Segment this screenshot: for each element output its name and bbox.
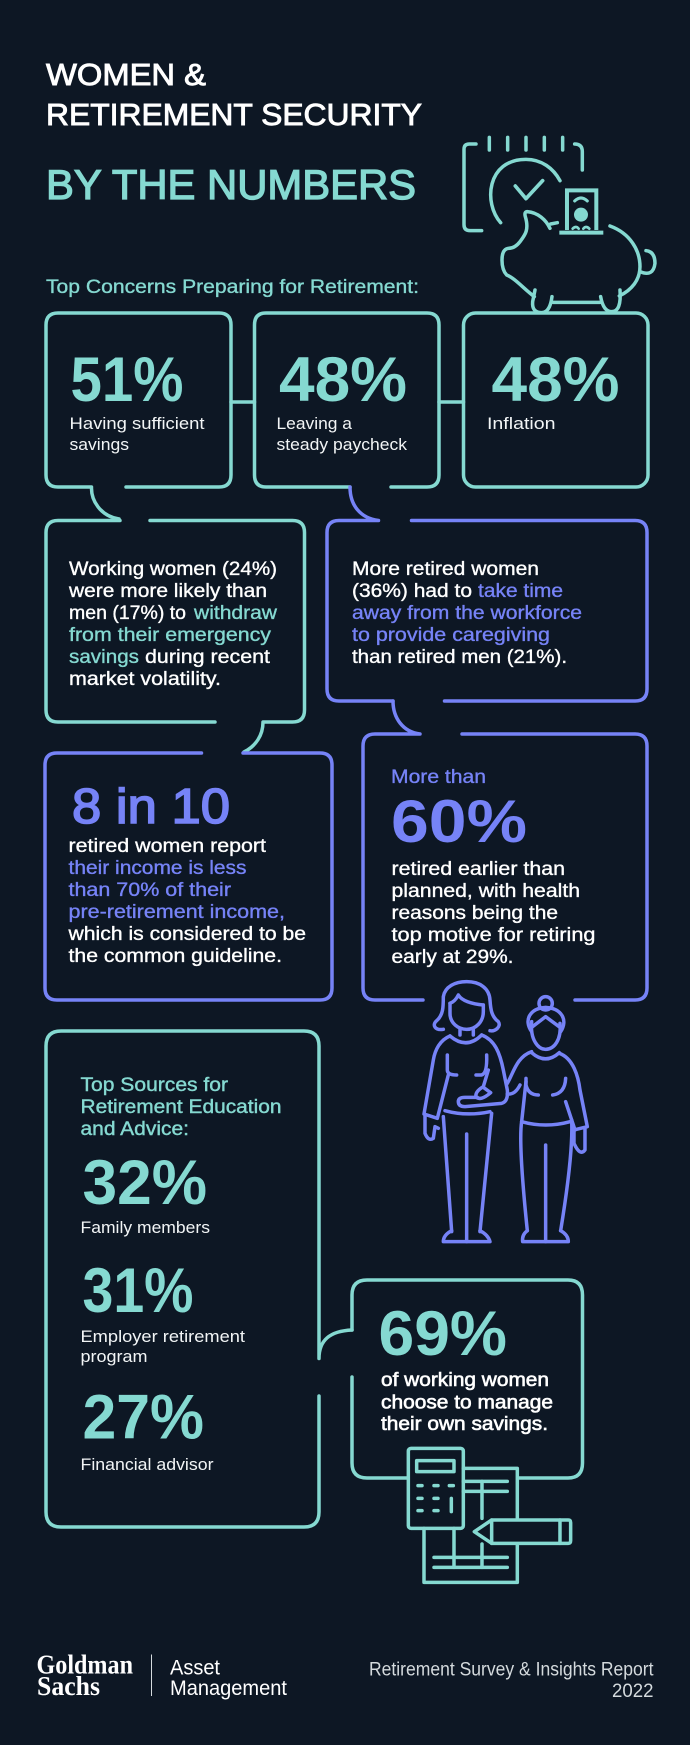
footer: asset management: Asset bbox=[170, 1656, 220, 1680]
footer: goldman sachs logo bbox=[36, 1650, 133, 1701]
footer: report name and year: Retirement Survey & Insights Report bbox=[369, 1660, 654, 1680]
panel: 8 in 10 retired women: retired women report bbox=[68, 836, 267, 857]
panel: caregiving time away: take time bbox=[478, 581, 563, 602]
heading: top sources: Retirement Education bbox=[80, 1097, 282, 1118]
footer: asset management bbox=[170, 1656, 287, 1700]
panel: emergency savings withdrawal: withdraw bbox=[193, 603, 277, 624]
panel: 69% manage own savings: their own savings. bbox=[381, 1414, 548, 1435]
stat: 31% employer retirement program: Employer retirement bbox=[80, 1327, 245, 1346]
panel: caregiving time away: (36%) had to bbox=[352, 581, 472, 602]
panel: 69% manage own savings: 69% bbox=[378, 1299, 507, 1369]
stat: 32% family members: Family members bbox=[80, 1218, 210, 1237]
panel: 69% manage own savings: of working women bbox=[381, 1370, 549, 1391]
panel: emergency savings withdrawal bbox=[46, 520, 304, 752]
panel: 48% inflation bbox=[464, 313, 648, 487]
panel: 8 in 10 retired women: pre-retirement income, bbox=[68, 902, 285, 923]
icon: clock and piggy bank bbox=[464, 137, 655, 313]
panel: more than 60% retired earlier: top motive for retiring bbox=[392, 925, 596, 946]
panel: 51% having sufficient savings bbox=[46, 313, 231, 519]
panel: caregiving time away: More retired women bbox=[352, 559, 539, 580]
footer: asset management: Management bbox=[170, 1677, 287, 1700]
title bbox=[46, 57, 422, 132]
panel: 8 in 10 retired women: 8 in 10 bbox=[72, 780, 230, 834]
footer: report name and year: 2022 bbox=[612, 1681, 654, 1702]
panel: caregiving time away: to provide caregiving bbox=[352, 625, 550, 646]
stat: 31% employer retirement program bbox=[80, 1256, 245, 1366]
panel: 8 in 10 retired women: their income is less bbox=[68, 858, 246, 879]
panel: emergency savings withdrawal: from their emergency bbox=[69, 625, 272, 646]
panel: 51% having sufficient savings: 51% bbox=[70, 345, 184, 415]
panel: 48% inflation: 48% bbox=[492, 345, 620, 415]
panel: more than 60% retired earlier: 60% bbox=[391, 788, 527, 855]
heading: top sources bbox=[80, 1075, 282, 1140]
panel: 48% inflation: Inflation bbox=[487, 414, 556, 433]
panel: more than 60% retired earlier: early at 29%. bbox=[392, 947, 514, 968]
panel: caregiving time away: than retired men (21%). bbox=[352, 647, 567, 668]
title: RETIREMENT SECURITY bbox=[46, 97, 422, 132]
subtitle: by the numbers: BY THE NUMBERS bbox=[46, 161, 416, 208]
footer: goldman sachs logo: Sachs bbox=[37, 1671, 100, 1701]
section heading: top concerns: Top Concerns Preparing for Retirement: bbox=[46, 276, 419, 298]
panel: more than 60% retired earlier: reasons being the bbox=[392, 903, 558, 924]
icon: two women arm in arm bbox=[424, 982, 587, 1242]
panel: emergency savings withdrawal: were more likely than bbox=[68, 581, 267, 602]
panel: 8 in 10 retired women: which is considered to be bbox=[67, 924, 306, 945]
panel: 48% leaving a steady paycheck: 48% bbox=[279, 345, 407, 415]
panel: emergency savings withdrawal: Working women (24%) bbox=[69, 559, 277, 580]
stat: 31% employer retirement program: program bbox=[80, 1347, 148, 1366]
panel: emergency savings withdrawal: men (17%) to bbox=[69, 603, 186, 624]
title: WOMEN & bbox=[46, 57, 206, 92]
panel: 48% leaving a steady paycheck bbox=[254, 313, 439, 487]
footer: report name and year bbox=[369, 1660, 654, 1702]
panel: 48% leaving a steady paycheck: Leaving a bbox=[276, 414, 353, 433]
icon: calculator, document and pencil bbox=[408, 1448, 571, 1582]
panel: caregiving time away bbox=[327, 487, 647, 701]
panel: 8 in 10 retired women: than 70% of their bbox=[68, 880, 232, 901]
panel: 8 in 10 retired women: the common guideline. bbox=[68, 946, 282, 967]
panel: more than 60% retired earlier: More than bbox=[391, 767, 486, 788]
stat: 32% family members: 32% bbox=[82, 1148, 207, 1218]
panel: top sources for retirement education bbox=[46, 1031, 352, 1527]
panel: 48% leaving a steady paycheck: steady paycheck bbox=[276, 435, 408, 454]
panel: more than 60% retired earlier: retired earlier than bbox=[392, 859, 565, 880]
panel: 51% having sufficient savings: savings bbox=[70, 435, 129, 454]
panel: 69% manage own savings: choose to manage bbox=[381, 1392, 553, 1414]
footer: goldman sachs logo: Goldman bbox=[36, 1650, 133, 1680]
heading: top sources: Top Sources for bbox=[80, 1075, 229, 1096]
heading: top sources: and Advice: bbox=[80, 1119, 189, 1140]
panel: more than 60% retired earlier bbox=[363, 701, 647, 1000]
panel: 69% manage own savings bbox=[352, 1280, 582, 1478]
panel: emergency savings withdrawal: market volatility. bbox=[69, 669, 221, 690]
stat: 27% financial advisor: 27% bbox=[82, 1382, 204, 1452]
panel: emergency savings withdrawal: during recent bbox=[145, 647, 271, 668]
panel: caregiving time away: away from the workforce bbox=[352, 603, 582, 624]
panel: emergency savings withdrawal: savings bbox=[69, 647, 139, 668]
stat: 31% employer retirement program: 31% bbox=[82, 1256, 194, 1326]
stat: 27% financial advisor: Financial advisor bbox=[80, 1455, 214, 1474]
panel: 51% having sufficient savings: Having sufficient bbox=[70, 414, 205, 433]
panel: 8 in 10 retired women bbox=[45, 753, 332, 1000]
panel: more than 60% retired earlier: planned, with health bbox=[392, 881, 580, 902]
